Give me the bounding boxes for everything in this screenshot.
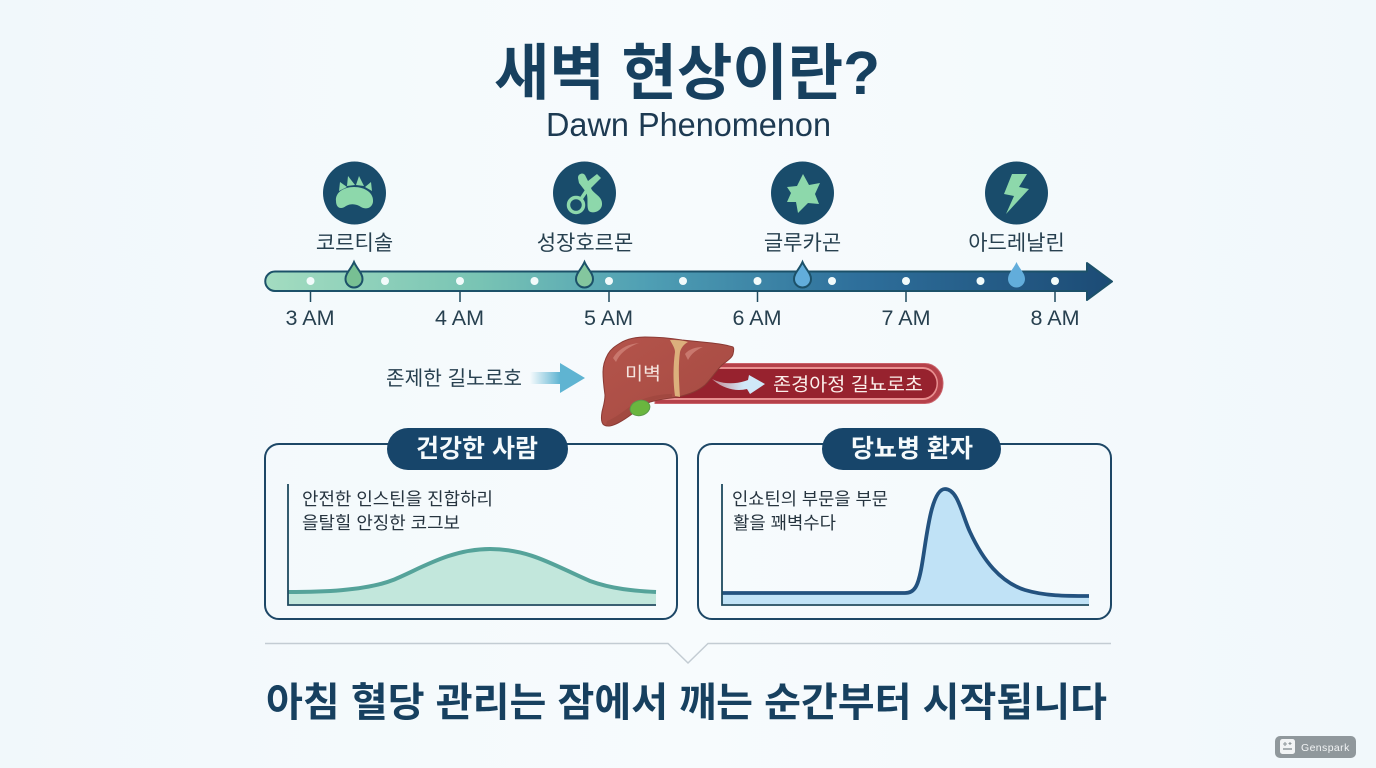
- subtitle: Dawn Phenomenon: [546, 106, 831, 143]
- divider with pointer: [265, 644, 1111, 663]
- icon: adrenaline bolt: [985, 162, 1048, 224]
- chart: stable glucose curve: [288, 484, 656, 605]
- time ticks and labels: 8 AM: [1030, 306, 1080, 330]
- hormone labels: [316, 232, 1065, 255]
- output label: 존경아정 길뇨로초: [773, 374, 923, 395]
- hormone labels: 성장호르몬: [537, 232, 633, 255]
- description: 인쇼틴의 부문을 부문: [732, 489, 888, 509]
- output blood vessel band: [655, 364, 943, 404]
- watermark badge: Genspark: [1301, 742, 1350, 754]
- liver label: 미벽: [625, 364, 661, 384]
- input arrow: [530, 363, 585, 393]
- hormone timeline: [265, 262, 1112, 330]
- time ticks and labels: 7 AM: [882, 306, 930, 330]
- heading: healthy person: [387, 428, 568, 470]
- description: 을탈힐 안징한 코그보: [302, 513, 460, 533]
- hormone labels: 글루카곤: [764, 232, 841, 255]
- heading: diabetes patient: 당뇨병 환자: [851, 435, 973, 463]
- description: 활을 꽤벽수다: [733, 513, 836, 533]
- timeline arrow bar: [265, 263, 1112, 300]
- drop marker: cortisol: [346, 262, 362, 288]
- bottom takeaway: 아침 혈당 관리는 잠에서 깨는 순간부터 시작됩니다: [266, 681, 1107, 725]
- watermark badge: [1275, 736, 1356, 758]
- heading: healthy person: 건강한 사람: [416, 435, 538, 463]
- hormone labels: 아드레날린: [968, 232, 1065, 255]
- drop marker: adrenaline: [1008, 262, 1025, 288]
- description: [302, 489, 493, 533]
- time ticks and labels: 3 AM: [286, 306, 334, 330]
- icon: growth hormone: [553, 162, 616, 224]
- time ticks and labels: [286, 291, 1080, 330]
- chart: glucose spike curve: [722, 484, 1089, 605]
- time ticks and labels: 4 AM: [435, 306, 484, 330]
- title: 새벽 현상이란?: [494, 39, 880, 107]
- drop marker: glucagon: [794, 262, 811, 288]
- description: [732, 489, 888, 533]
- time ticks and labels: 5 AM: [584, 306, 633, 330]
- hormone labels: 코르티솔: [316, 232, 393, 255]
- heading: diabetes patient: [822, 428, 1001, 470]
- input label: 존제한 길노로호: [386, 367, 522, 390]
- description: 안전한 인스틴을 진합하리: [302, 489, 493, 509]
- liver: [601, 337, 734, 426]
- output arrow: [712, 375, 765, 394]
- icon: adrenal gland: [323, 162, 386, 224]
- drop marker: growth hormone: [576, 262, 593, 288]
- time ticks and labels: 6 AM: [732, 306, 782, 330]
- panel: diabetes patient: [698, 428, 1111, 619]
- icon: glucagon star: [771, 162, 834, 224]
- liver glucose section: [386, 337, 943, 426]
- panel: healthy person: [265, 428, 677, 619]
- gallbladder: [628, 398, 652, 418]
